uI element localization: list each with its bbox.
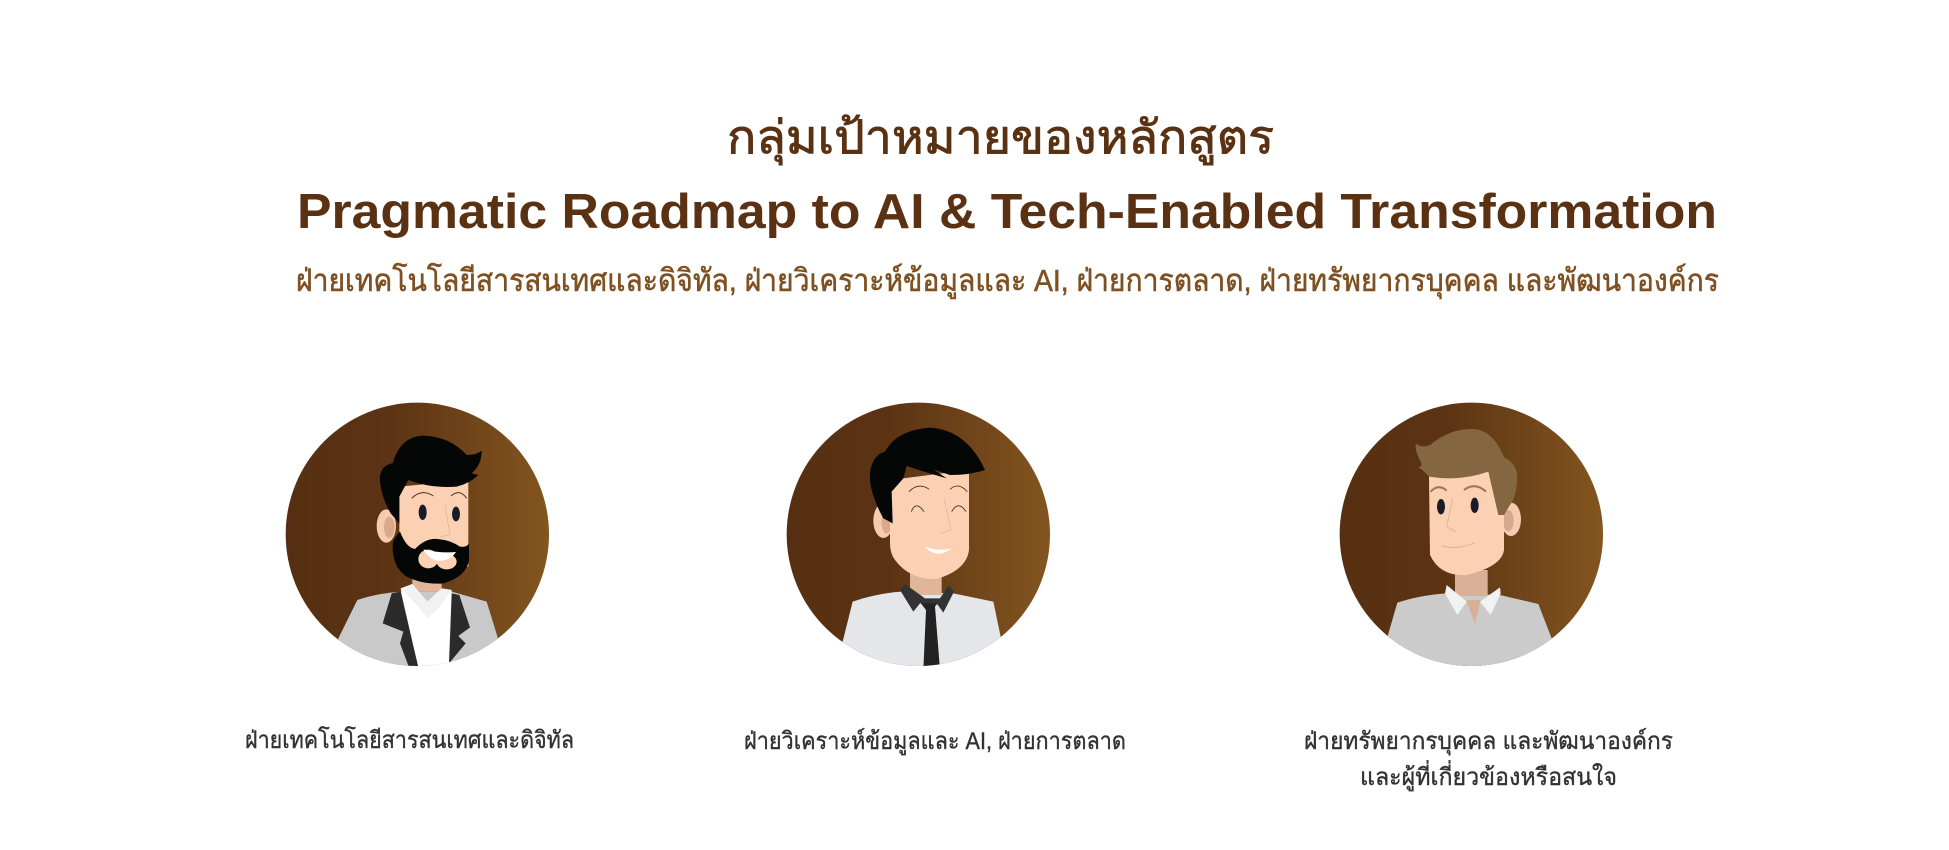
icon: smiling man with tie avatar: [787, 403, 1050, 680]
caption: IT and digital: ฝ่ายเทคโนโลยีสารสนเทศและดิจิทัล: [245, 726, 574, 754]
subtitle: target departments: ฝ่ายเทคโนโลยีสารสนเทศและดิจิทัล, ฝ่ายวิเคราะห์ข้อมูลและ AI, ฝ่ายการตลาด, ฝ่ายทรัพยากรบุคคล และพัฒนาองค์กร: [296, 263, 1719, 300]
caption: data analytics, AI and marketing: ฝ่ายวิเคราะห์ข้อมูลและ AI, ฝ่ายการตลาด: [744, 727, 1126, 756]
icon: brown-haired man avatar: [1340, 403, 1603, 680]
caption: HR and organisation development: และผู้ที่เกี่ยวข้องหรือสนใจ: [1360, 760, 1617, 792]
icon: bearded man avatar: [286, 403, 549, 680]
infographic canvas: [246, 114, 1718, 792]
title: course name: Pragmatic Roadmap to AI & Tech-Enabled Transformation: [297, 185, 1717, 239]
caption: HR and organisation development: [1304, 727, 1673, 792]
caption: HR and organisation development: ฝ่ายทรัพยากรบุคคล และพัฒนาองค์กร: [1304, 727, 1673, 756]
title: Thai heading: กลุ่มเป้าหมายของหลักสูตร: [727, 111, 1274, 166]
